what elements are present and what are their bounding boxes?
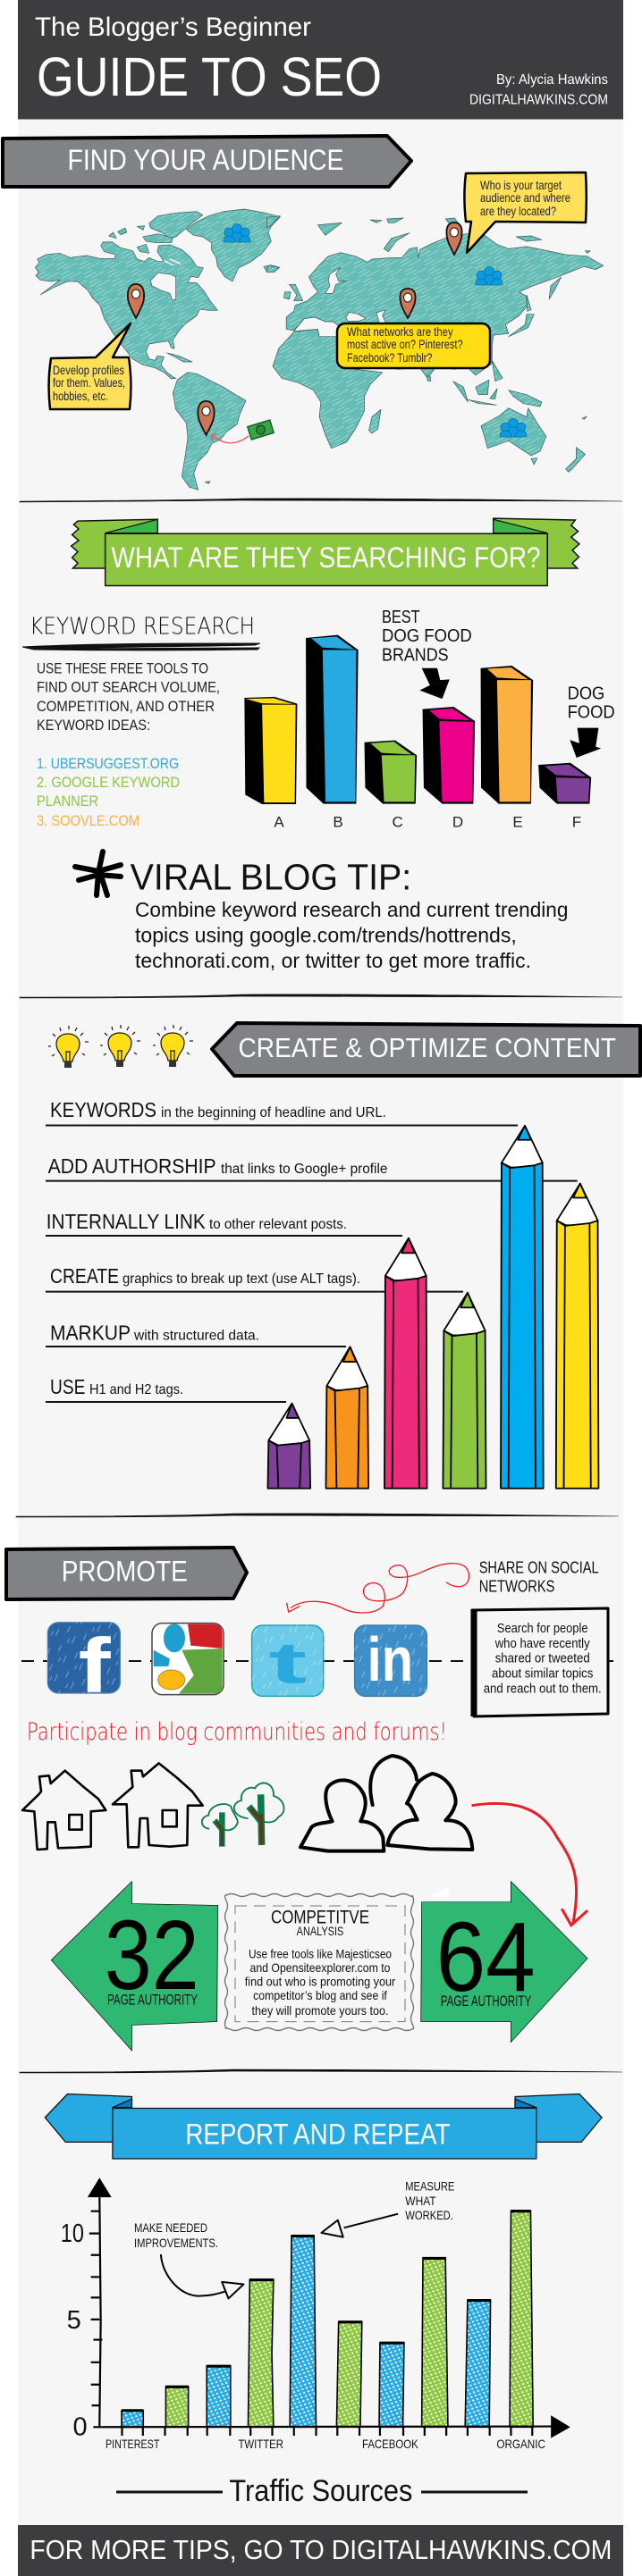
arrow: page authority 64	[421, 1882, 587, 2043]
icon: light bulb one	[48, 1026, 89, 1068]
pencil: yellow	[556, 1184, 598, 1489]
icon: large tree	[234, 1783, 284, 1845]
annotation: measure what worked	[321, 2179, 454, 2237]
note box: search for people: about similar topics	[492, 1666, 593, 1682]
annotation: measure what worked: MEASURE	[405, 2179, 454, 2194]
icon: group of people	[300, 1756, 472, 1851]
bar chart axis labels: A	[274, 814, 284, 831]
list row: markup	[46, 1322, 346, 1347]
bar chart axis labels	[274, 814, 581, 831]
heading banner: promote: PROMOTE	[62, 1556, 188, 1588]
bar chart axis labels: C	[392, 814, 403, 831]
icon: map pin north america	[128, 284, 144, 318]
heading: keyword research: KEYWORD RESEARCH	[30, 613, 255, 640]
list: keyword tools: PLANNER	[37, 793, 98, 810]
panel: competitive analysis: find out who is promoting your	[245, 1974, 396, 1988]
annotation: measure what worked: WORKED.	[405, 2208, 453, 2222]
text block: viral blog tip: topics using google.com/trends/hottrends,	[135, 924, 517, 947]
panel: competitive analysis: and Opensiteexplorer.com to	[250, 1960, 391, 1975]
list row: add authorship: that links to Google+ profile	[221, 1162, 387, 1177]
icon: light bulb two	[100, 1025, 140, 1067]
chart x axis labels: TWITTER	[238, 2437, 283, 2451]
section: promote	[6, 1548, 619, 2051]
text block: free tools intro	[37, 659, 220, 734]
bar chart axis labels: E	[512, 814, 523, 831]
icon: twitter: t	[269, 1630, 307, 1695]
list: keyword tools: 1. UBERSUGGEST.ORG	[37, 755, 179, 772]
annotation: make needed improvements: MAKE NEEDED	[134, 2220, 207, 2235]
icon: audience group greenland	[224, 223, 250, 242]
pencil: blue	[501, 1126, 544, 1489]
world map: europe, asia, africa, australia	[266, 216, 604, 472]
list: keyword tools: 3. SOOVLE.COM	[37, 812, 139, 829]
icon: map pin central asia	[400, 289, 416, 318]
list row: keywords: KEYWORDS	[50, 1098, 156, 1121]
pencil chart	[267, 1126, 598, 1489]
ribbon heading: what are they searching for: WHAT ARE THEY SEARCHING FOR?	[111, 541, 540, 574]
icon: audience group asia	[476, 266, 503, 285]
ribbon heading: report and repeat: REPORT AND REPEAT	[185, 2119, 450, 2151]
icon: audience group australia	[500, 418, 527, 437]
annotation: make needed improvements: IMPROVEMENTS.	[134, 2236, 218, 2250]
arrow: page authority 32: 32	[105, 1901, 199, 2010]
icon: house one	[22, 1771, 106, 1850]
annotation: dog food	[568, 684, 615, 758]
arrow: red curve to page authority	[472, 1803, 587, 1926]
icon: google	[152, 1624, 224, 1695]
header band	[18, 0, 623, 120]
chart x axis labels: ORGANIC	[496, 2437, 545, 2451]
icon: facebook: f	[79, 1623, 112, 1708]
annotation: dog food: FOOD	[568, 703, 615, 723]
icon: asterisk star	[75, 852, 121, 895]
chart y axis numbers: 0	[73, 2413, 88, 2442]
bar chart axis labels: B	[333, 814, 343, 831]
annotation: share on social networks: NETWORKS	[479, 1578, 554, 1596]
illustration: neighbourhood and community	[22, 1756, 472, 1851]
callout: target audience: are they located?	[480, 204, 556, 218]
panel: competitive analysis: competitor’s blog and see if	[253, 1988, 387, 2002]
author credit: By: Alycia Hawkins	[496, 72, 608, 88]
list row: internally link	[46, 1210, 402, 1236]
note box: search for people: shared or tweeted	[495, 1651, 590, 1666]
list: keyword tools	[37, 755, 180, 829]
text block: free tools intro: USE THESE FREE TOOLS TO	[37, 659, 208, 676]
bar chart axis labels: D	[452, 814, 463, 831]
footer band	[18, 2525, 623, 2576]
list row: create: graphics to break up text (use ALT tags).	[122, 1271, 360, 1287]
section: keyword searching	[22, 518, 615, 972]
callout: target audience: Who is your target	[480, 178, 562, 192]
heading banner: create and optimize content	[212, 1023, 640, 1076]
chart axes	[89, 2179, 569, 2437]
text block: free tools intro: COMPETITION, AND OTHER	[37, 698, 215, 715]
callout: networks: Facebook? Tumblr?	[347, 350, 433, 365]
text block: viral blog tip: VIRAL BLOG TIP:	[131, 857, 411, 898]
callout: networks	[337, 323, 490, 368]
icon: light bulb three	[153, 1025, 193, 1067]
text block: free tools intro: FIND OUT SEARCH VOLUME,	[37, 679, 220, 695]
text block: viral blog tip: Combine keyword research and current trending	[135, 898, 569, 921]
chart y axis numbers	[61, 2219, 88, 2442]
annotation: share on social networks: SHARE ON SOCIAL	[479, 1558, 599, 1576]
callout: target audience	[465, 172, 587, 253]
annotation: best dog food brands: DOG FOOD	[382, 626, 472, 646]
panel: competitive analysis: COMPETITVE	[271, 1908, 369, 1928]
list row: add authorship	[46, 1154, 578, 1181]
bars: traffic by source	[122, 2211, 533, 2427]
list row: use: H1 and H2 tags.	[89, 1382, 183, 1397]
list row: use	[46, 1375, 286, 1402]
annotation: measure what worked: WHAT	[405, 2194, 436, 2208]
chart title: traffic sources: Traffic Sources	[229, 2474, 412, 2508]
pencil: green	[443, 1293, 486, 1489]
section: report and repeat	[45, 2094, 602, 2508]
heading banner: find your audience	[3, 136, 411, 187]
bar chart: traffic sources	[61, 2179, 569, 2451]
social icons row	[47, 1623, 427, 1708]
pencil: orange	[325, 1347, 368, 1489]
heading: keyword research	[22, 613, 260, 650]
annotation: best dog food brands: BEST	[382, 608, 420, 627]
heading banner: find your audience: FIND YOUR AUDIENCE	[68, 144, 343, 176]
arrow: page authority 64: PAGE AUTHORITY	[441, 1993, 531, 2010]
arrow: red squiggle to twitter	[287, 1564, 469, 1613]
list row: add authorship: ADD AUTHORSHIP	[48, 1154, 216, 1178]
text block: viral blog tip	[131, 857, 569, 972]
icon: house two	[113, 1763, 203, 1847]
list row: keywords	[46, 1098, 518, 1126]
author credit: DIGITALHAWKINS.COM	[469, 93, 608, 107]
note box: search for people: who have recently	[494, 1636, 590, 1651]
icon: map pin south america	[198, 401, 215, 435]
callout: networks: What networks are they	[347, 324, 453, 339]
list row: create	[46, 1264, 463, 1292]
list row: create: CREATE	[50, 1264, 119, 1288]
ribbon heading: what are they searching for	[72, 518, 579, 585]
author credit	[469, 72, 608, 107]
icon: twitter	[252, 1625, 324, 1696]
annotation: best dog food brands	[382, 608, 472, 699]
text block: viral blog tip: technorati.com, or twitter to get more traffic.	[135, 949, 531, 972]
arrow: page authority 64: 64	[436, 1902, 536, 2012]
note box: search for people: Search for people	[497, 1621, 588, 1636]
heading banner: promote	[6, 1548, 247, 1599]
header title line 2: GUIDE TO SEO	[37, 46, 382, 107]
arrow: page authority 32: PAGE AUTHORITY	[107, 1991, 198, 2008]
callout: networks: most active on? Pinterest?	[347, 337, 463, 351]
list: keyword tools: 2. GOOGLE KEYWORD	[37, 774, 180, 791]
list row: internally link: INTERNALLY LINK	[46, 1210, 206, 1233]
world map: americas	[35, 209, 280, 490]
chart y axis numbers: 10	[61, 2219, 84, 2248]
panel: competitive analysis	[225, 1894, 413, 2030]
callout: target audience: audience and where	[480, 190, 570, 205]
chart x axis labels: FACEBOOK	[362, 2437, 418, 2451]
bar chart: keyword volume	[245, 635, 591, 831]
note box: search for people: and reach out to them.	[484, 1681, 602, 1696]
bar chart axis labels: F	[572, 814, 581, 831]
header title line 1: The Blogger’s Beginner	[35, 13, 311, 42]
callout: develop profiles: Develop profiles	[53, 363, 124, 377]
callout: develop profiles: hobbies, etc.	[53, 389, 108, 403]
section: create and optimize content	[46, 1023, 640, 1489]
icon: money bill with red arrow	[211, 420, 274, 443]
icon: linkedin: in	[367, 1624, 413, 1694]
section: find your audience	[3, 136, 604, 490]
list row: keywords: in the beginning of headline and URL.	[161, 1105, 386, 1120]
pencil: pink	[384, 1238, 427, 1489]
icon: map pin siberia	[446, 222, 462, 255]
chart y axis numbers: 5	[67, 2306, 81, 2335]
list row: markup: with structured data.	[133, 1329, 259, 1344]
callout: develop profiles	[49, 323, 131, 409]
icon: facebook	[47, 1623, 120, 1708]
list row: internally link: to other relevant posts.	[209, 1217, 347, 1232]
chart x axis labels: PINTEREST	[106, 2437, 160, 2451]
list row: use: USE	[50, 1375, 85, 1398]
note box: search for people	[472, 1608, 608, 1716]
annotation: share on social networks	[479, 1558, 599, 1596]
list row: markup: MARKUP	[50, 1322, 131, 1345]
ribbon heading: report and repeat	[45, 2094, 602, 2159]
annotation: dog food: DOG	[568, 684, 604, 704]
text block: free tools intro: KEYWORD IDEAS:	[37, 717, 150, 734]
arrow: page authority 32	[51, 1882, 218, 2051]
annotation: make needed improvements	[134, 2220, 243, 2298]
chart x axis labels	[106, 2437, 545, 2451]
icon: small tree	[202, 1804, 238, 1847]
annotation: best dog food brands: BRANDS	[382, 646, 449, 666]
panel: competitive analysis: they will promote yours too.	[252, 2003, 388, 2018]
panel: competitive analysis: ANALYSIS	[297, 1924, 343, 1938]
pencil: purple	[267, 1404, 310, 1489]
panel: competitive analysis: Use free tools like Majesticseo	[249, 1946, 392, 1960]
callout: develop profiles: for them. Values,	[53, 375, 125, 390]
heading: participate in blog communities: Participate in blog communities and forums!	[27, 1718, 447, 1746]
